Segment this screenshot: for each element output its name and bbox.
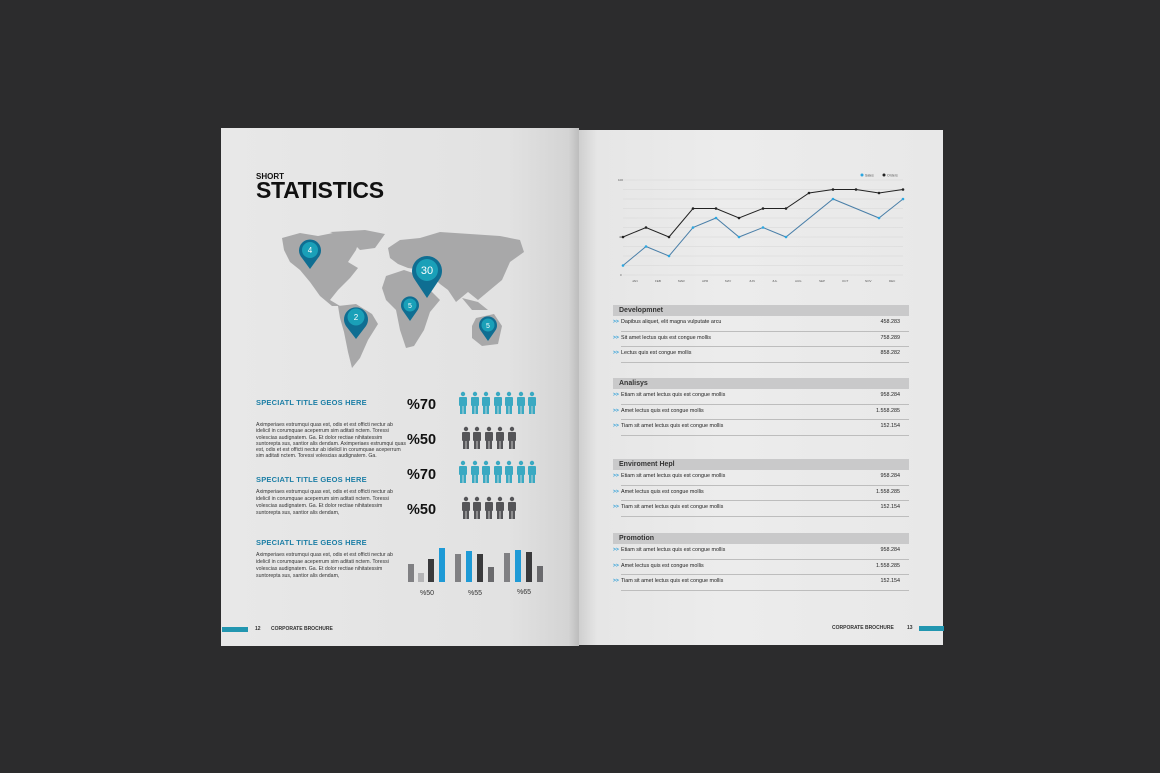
table: environment: Enviroment Hepl: [619, 461, 675, 468]
table: development: 758.289: [880, 335, 900, 341]
percentages: %70: [407, 397, 436, 413]
text block 1: [256, 398, 406, 459]
table: promotion: Promotion: [619, 535, 654, 542]
left footer: CORPORATE BROCHURE: [271, 626, 333, 632]
line chart: JUN: [749, 279, 755, 283]
table: promotion: [613, 533, 909, 591]
table: analysis: Amet lectus quis est congue mollis: [621, 408, 704, 414]
table: development: [613, 305, 909, 363]
text block 3: SPECIATL TITLE GEOS HERE: [256, 538, 367, 547]
line chart: Sales: [865, 174, 874, 178]
table: analysis: Tiam sit amet lectus quis est congue mollis: [621, 423, 723, 429]
table: environment: Tiam sit amet lectus quis est congue mollis: [621, 504, 723, 510]
line chart: [618, 174, 904, 283]
bar chart: [408, 548, 543, 597]
world map with pins: 2: [354, 313, 359, 322]
bar chart: %65: [517, 589, 531, 596]
line chart: NOV: [865, 279, 872, 283]
table: analysis: >>: [613, 408, 619, 414]
table: promotion: >>: [613, 563, 619, 569]
line chart: Orders: [887, 174, 898, 178]
world map with pins: 5: [486, 323, 490, 330]
table: development: 858.282: [880, 350, 900, 356]
line chart: OCT: [842, 279, 848, 283]
title: STATISTICS: [256, 177, 384, 203]
table: environment: 152.154: [880, 504, 900, 510]
table: environment: >>: [613, 504, 619, 510]
percentages: [407, 397, 436, 518]
world map with pins: 5: [408, 303, 412, 310]
table: analysis: >>: [613, 423, 619, 429]
table: analysis: >>: [613, 392, 619, 398]
text block 1: SPECIATL TITLE GEOS HERE: [256, 398, 367, 407]
percentages: %70: [407, 467, 436, 483]
line chart: MAY: [725, 279, 731, 283]
table: promotion: Tiam sit amet lectus quis est congue mollis: [621, 578, 723, 584]
title: SHORT: [256, 172, 284, 181]
line chart: FEB: [655, 279, 661, 283]
text block 3: Aximperiaes estrumqui quas est, odis et est officti nectur ab idelicil in corumquae aceperrum sim aditati nctem. Toressi volescias audignatem. Ga. Et dolor rectiae nihitatessim suntorepta sus, santior alis dendam,: [256, 552, 393, 579]
line chart: AUG: [795, 279, 802, 283]
table: development: Dapibus aliquet, elit magna vulputate arcu: [621, 319, 721, 325]
table: analysis: 152.154: [880, 423, 900, 429]
table: development: >>: [613, 350, 619, 356]
people icons: [459, 392, 536, 519]
table: analysis: 1.558.285: [876, 408, 900, 414]
table: analysis: Etiam sit amet lectus quis est congue mollis: [621, 392, 725, 398]
bar chart: %50: [420, 590, 434, 597]
right footer: 13: [907, 625, 913, 631]
table: development: 458.283: [880, 319, 900, 325]
percentages: %50: [407, 502, 436, 518]
table: promotion: 1.558.285: [876, 563, 900, 569]
table: environment: 1.558.285: [876, 489, 900, 495]
table: promotion: >>: [613, 547, 619, 553]
text block 2: Aximperiaes estrumqui quas est, odis et est officti nectur ab idelicil in corumquae aceperrum sim aditati nctem. Toressi volescias audignatem. Ga. Et dolor rectiae nihitatessim suntorepta sus, santior alis dendam,: [256, 489, 393, 516]
table: development: >>: [613, 319, 619, 325]
line chart: APR: [702, 279, 709, 283]
table: promotion: 958.284: [880, 547, 900, 553]
text block 2: SPECIATL TITLE GEOS HERE: [256, 475, 367, 484]
table: analysis: Analisys: [619, 380, 648, 387]
left footer: 12: [255, 626, 261, 632]
line chart: 0: [620, 273, 622, 277]
bar chart: %55: [468, 590, 482, 597]
table: promotion: 152.154: [880, 578, 900, 584]
world map with pins: [282, 230, 524, 368]
table: development: Developmnet: [619, 307, 663, 314]
line chart: 100: [618, 178, 623, 182]
table: environment: >>: [613, 473, 619, 479]
table: promotion: Etiam sit amet lectus quis est congue mollis: [621, 547, 725, 553]
table: environment: >>: [613, 489, 619, 495]
line chart: MAR: [678, 279, 686, 283]
table: development: Sit amet lectus quis est congue mollis: [621, 335, 711, 341]
world map with pins: 4: [308, 246, 313, 255]
table: analysis: [613, 378, 909, 436]
left page: [221, 128, 579, 646]
table: promotion: Amet lectus quis est congue mollis: [621, 563, 704, 569]
right footer: [832, 625, 944, 631]
line chart: 40: [619, 235, 623, 239]
table: promotion: >>: [613, 578, 619, 584]
right footer: CORPORATE BROCHURE: [832, 625, 894, 631]
line chart: JAN: [632, 279, 638, 283]
text block 2: [256, 475, 393, 516]
table: environment: Etiam sit amet lectus quis est congue mollis: [621, 473, 725, 479]
text block 3: [256, 538, 393, 579]
line chart: JUL: [772, 279, 778, 283]
table: analysis: 958.284: [880, 392, 900, 398]
table: environment: [613, 459, 909, 517]
world map with pins: 30: [421, 265, 433, 277]
left footer: [222, 626, 333, 632]
line chart: DEC: [889, 279, 896, 283]
table: environment: Amet lectus quis est congue mollis: [621, 489, 704, 495]
table: development: Lectus quis est congue mollis: [621, 350, 691, 356]
line chart: SEP: [819, 279, 825, 283]
table: development: >>: [613, 335, 619, 341]
table: environment: 958.284: [880, 473, 900, 479]
text block 1: Aximperiaes estrumqui quas est, odis et est officti nectur ab idelicil in corumquae aceperrum sim aditati nctem. Toressi volescias audignatem. Ga. Et dolor rectiae nihitatessim suntorepta sus, santior alis dendam. Aximperiaes estrumqui quas est, odis et est officti nectur ab idelicil in corumquae aceperrum sim aditati nctem. Toressi volescias audignatem. Ga.: [256, 422, 406, 459]
percentages: %50: [407, 432, 436, 448]
right page: [579, 130, 943, 645]
